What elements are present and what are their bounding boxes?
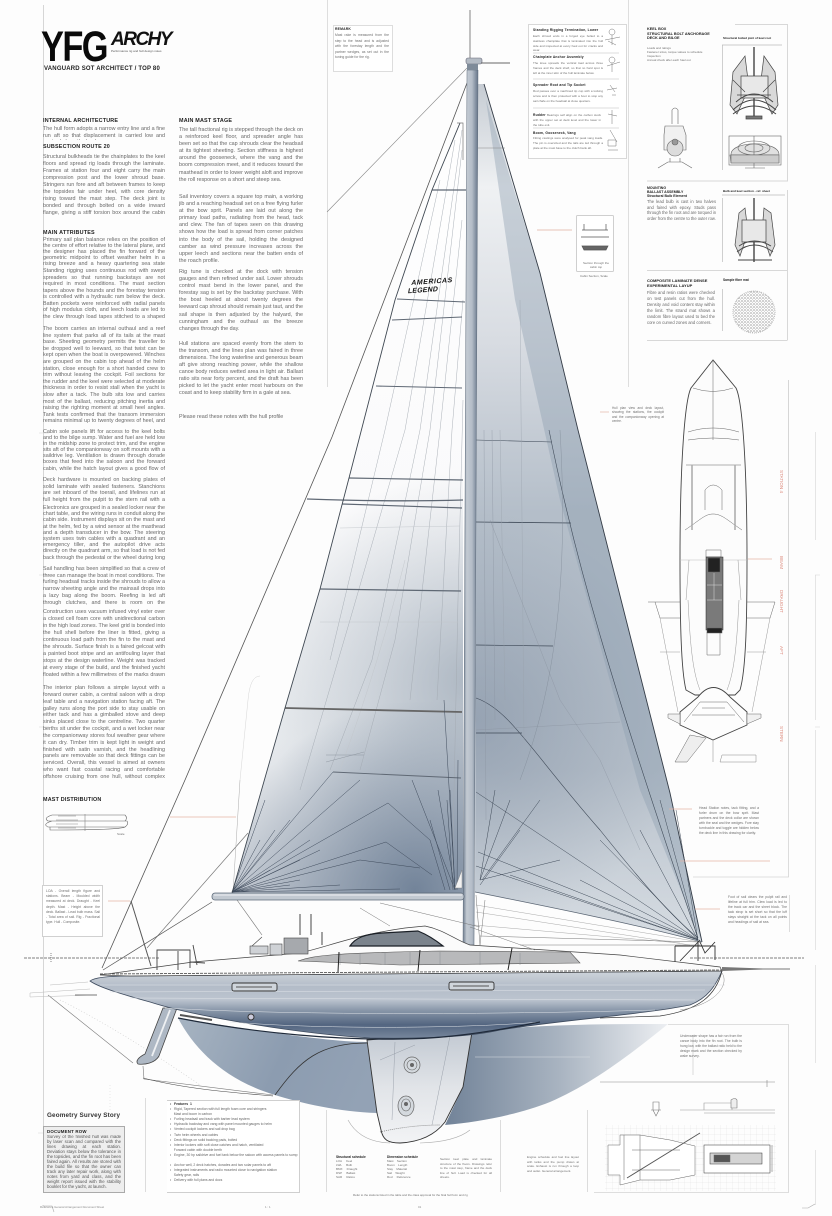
- small inset cabin drawing: [537, 216, 614, 272]
- small profile sketch: [658, 108, 692, 168]
- panel heading: [647, 278, 708, 288]
- panel heading: [647, 27, 710, 40]
- box text: Survey of the finished hull was made by laser scan and compared with the lines drawing at each station. Deviation stays below the tolerance in the topsides, and the fin root has been faired again. All results are stored with the build file so that the owner can track any later repair work, along with notes from yard and class, and the weight report issued with the stability booklet for the yacht, at launch.: [47, 1135, 121, 1189]
- inset text: Mast rake is measured from the step to the head and is adjusted with the forestay length and the partner wedges, as set out in the tuning guide for the rig.: [335, 33, 389, 59]
- mini drawing caption: Scale: [117, 832, 125, 836]
- red leader lines: [108, 412, 772, 909]
- hull port light: [232, 983, 277, 991]
- lower note three: Underwater shape has a fair run from the canoe body into the fin root. The bulb is hung low, with the ballast ratio held to the design mark and the section checked by wake survey.: [680, 1034, 742, 1058]
- list box: [167, 1100, 300, 1192]
- table one: BMX Draught: [336, 1167, 357, 1171]
- bow fitting and sprit: [675, 940, 790, 971]
- stipple study text: [647, 278, 749, 325]
- heading: MAIN ATTRIBUTES: [43, 230, 95, 236]
- label: DRAUGHT: [779, 590, 784, 613]
- main sail battens: [285, 190, 466, 778]
- list box text: [170, 1102, 298, 1182]
- panel heading: Structural Bulb Element: [647, 194, 687, 198]
- paragraph: Sail inventory covers a square top main, a working jib and a reaching headsail set on a free flying furler at the bow sprit. Panels are laid out along the primary load paths, radiating from the head, tack and clew. The fan of tapes seen on this drawing shows how the load is spread from corner patches into the body of the sail, holding the designed camber as wind pressure increases across the upper leech and sections near the batten ends of the roach profile.: [179, 194, 303, 264]
- survey box text: [47, 1129, 121, 1189]
- hull port light: [449, 982, 494, 990]
- head sail seams: [476, 148, 698, 938]
- heading: SUBSECTION ROUTE 20: [43, 144, 110, 150]
- paragraph: Rig tune is checked at the dock with tension gauges and then refined under sail. Lower shrouds control mast bend in the lower panel, and the forestay sag is set by the backstay purchase. With the boat heeled at about twenty degrees the leeward cap shroud should remain just taut, and the sail shape is then adjusted by the halyard, the cunningham and the outhaul as the breeze changes through the day.: [179, 269, 303, 332]
- label: STERN: [779, 726, 784, 742]
- label: AFT: [779, 646, 784, 655]
- panel heading: STRUCTURAL BOLT ANCHORAGE: [647, 32, 710, 36]
- list items: • Anchor well, 2 deck hatches, dorades and two solar panels to aft: [170, 1163, 271, 1167]
- survey heading: Geometry Survey Story: [47, 1112, 120, 1119]
- small inset label: Cabin Section, Scale: [580, 274, 608, 278]
- note one: Standing Rigging Termination, Lower: [533, 28, 598, 32]
- note block rules: [146, 800, 790, 1192]
- detail notes text: [533, 28, 603, 150]
- panel sub heading: Structural bolted joint of keel root: [723, 36, 771, 40]
- table one: Structural schedule: [336, 1155, 366, 1159]
- panel heading: MOUNTING: [647, 186, 666, 190]
- top-view hull plan: [648, 360, 775, 762]
- panel heading: [647, 186, 687, 198]
- heading: MAIN MAST STAGE: [179, 118, 232, 124]
- table one: LWL Bulb: [336, 1163, 352, 1167]
- list items: • Twin helm wheels and cables: [170, 1133, 218, 1137]
- table two: [387, 1155, 418, 1179]
- list heading: • Features 1: [170, 1102, 192, 1106]
- table one: LOA Keel: [336, 1159, 352, 1163]
- table one: SAR Ratios: [336, 1175, 355, 1179]
- underbody right: [445, 1024, 668, 1125]
- rigging stays: [102, 68, 467, 970]
- sail logo: AMERICAS: [411, 276, 453, 287]
- winch cluster: [250, 914, 322, 955]
- detail notes text: Bearings self align on the carbon stock with the upper set at deck level and the lower in the tube exit.: [533, 113, 601, 127]
- list items: • Rigid, Tapered section with full length foam core and stringers: [170, 1107, 266, 1111]
- panel note: Loads and ratings: [647, 46, 671, 50]
- detail notes text: Fitting castings were analysed for peak vang loads. The pin is oversized and the tails are led through a plate at the mast base to the clutch bank aft.: [533, 136, 603, 150]
- table four: Engine schedule and fuel line layout with tanks and the pump drawn at scale. Exhaust is run through a loop and outlet. General arrangement.: [527, 1155, 579, 1173]
- paragraph: The tall fractional rig is stepped through the deck on a reinforced keel floor, and spreader angle has been set so that the cap shrouds clear the headsail at its tightest sheeting. Section stiffness is highest around the gooseneck, where the vang and the boom compression meet, and it reduces toward the masthead in order to lower weight aloft and improve the roll response on a short and steep sea.: [179, 127, 303, 183]
- panel: keel hull section: [647, 24, 788, 181]
- top view note: Hull plan view and deck layout, showing the stations, the cockpit and the companionway opening at centre.: [612, 406, 664, 423]
- table note: Refer to the stations listed in the table and the class approval for the final hull form and rig: [353, 1193, 468, 1197]
- plan schematic: [605, 1125, 776, 1191]
- label: STATION 4: [779, 470, 784, 493]
- paragraph: Hull stations are spaced evenly from the stem to the transom, and the lines plan was faired in three dimensions. The long waterline and generous beam aft give strong reaching power, while the shallow canoe body reduces wetted area in light air. Ballast ratio sits near forty percent, and the draft has been picked to let the yacht enter most harbours on the coast and to keep stability firm in a gale at sea.: [179, 341, 303, 396]
- engine detail icons: [651, 1098, 775, 1116]
- masthead fitting: [466, 10, 510, 70]
- legend box text: LOA - Overall length figure and stations. Beam - Moulded width measured at deck. Draught - Keel depth. Mast - Height above the deck. Ballast - Lead bulb mass. Sail - Total area of sail. Rig - Fractional type. Hull - Composite.: [46, 889, 100, 924]
- sail logo note top inset: [335, 27, 389, 59]
- panel: detail notes: [528, 24, 626, 158]
- underbody left: [178, 1018, 377, 1113]
- section plan: [729, 136, 781, 168]
- panel note: Inspection: [647, 54, 661, 58]
- sail logo: [407, 276, 453, 295]
- panel heading: KEEL BOX: [647, 27, 666, 31]
- specification tables: [336, 1155, 579, 1197]
- footer: [40, 1205, 422, 1209]
- lower note one: Head Station notes, tack fitting, and a furler drum on the bow sprit. Mast partners and the deck collar are shown with the seal and the wedges. Fore stay turnbuckle and toggle are hidden below the deck line in this drawing for clarity.: [699, 806, 759, 835]
- panel sub heading: Bulb and keel section - ref. sheet: [723, 189, 770, 193]
- list items: • Deck fittings on solid backing pads, bolted: [170, 1138, 237, 1142]
- list items: • Hydraulic backstay and vang with panel mounted gauges to helm: [170, 1122, 272, 1126]
- title tagline: Performance rig and hull design notes: [111, 49, 162, 53]
- panel note: Annual check after each haul out: [647, 58, 691, 62]
- detail notes text: Each shroud ends in a forged eye bolted to a stainless chainplate that is laminated into the hull side and inspected at every haul out for cracks and wear.: [533, 34, 603, 52]
- central cockpit: [706, 557, 723, 630]
- page number: 1 : 1: [265, 1205, 271, 1209]
- panel heading: DECK AND BILGE: [647, 36, 680, 40]
- lower note two: Foot of sail clears the pulpit rail and lifeline at full trim. Clew load is led to the track car and the sheet block. The tack strop is set short so that the luff stays straight at the tack on all points and headings of sail at sea.: [728, 895, 787, 924]
- list items: • Furling headsail and track with barber lead system: [170, 1117, 250, 1121]
- title wordmark: YFG: [41, 23, 107, 71]
- panel heading: COMPOSITE LAMINATE DENSE: [647, 278, 707, 283]
- note four: Rudder: [533, 113, 546, 117]
- title italic: ARCHY: [111, 29, 171, 50]
- panel note: Fibre and resin ratios were checked on test panels cut from the hull. Density and void content stay within the limit. The strand mat shows a random fibre layout used to bed the core on curved zones and corners.: [647, 290, 715, 325]
- grey survey box: [44, 1126, 124, 1192]
- detail notes text: Rod passes over a machined tip cup with a locking screw and is then protected with a boot to stop any sail chafe on the headsail at close quarters.: [533, 89, 603, 103]
- detail notes text: The knee spreads the vertical load across three frames and the deck shelf, so that no hard spot is left at the inner skin of the hull laminate below.: [533, 61, 603, 75]
- table two: Stay Material: [387, 1167, 407, 1171]
- note three: Spreader Root and Tip Socket: [533, 83, 586, 87]
- table two: Rod Reference: [387, 1175, 411, 1179]
- title: [41, 23, 174, 71]
- keel section text: [647, 27, 772, 62]
- list items: • Engine, 30 hp saildrive and fuel tank below the saloon with access panels to sump: [170, 1153, 297, 1157]
- mast distribution heading: MAST DISTRIBUTION: [43, 797, 102, 803]
- list items: • Integrated instruments and radio mounted close to navigation station: [170, 1168, 277, 1172]
- table three: Section keel plate and laminate structure of the floors. Drawings refer to the mast step, frame and the deck line of hull. Load is checked for all sheets.: [440, 1157, 492, 1179]
- head sail fan lines: [476, 790, 698, 940]
- left column text: [43, 118, 165, 781]
- panel note: Fastener sizes, torque values to schedule: [647, 50, 702, 54]
- bow pulpit: [157, 945, 205, 970]
- cabin window: [350, 931, 443, 946]
- list items: [170, 1107, 298, 1182]
- main sail: [232, 123, 466, 893]
- table two: Dimension schedule: [387, 1155, 418, 1159]
- note two: Chainplate Anchor Assembly: [533, 55, 584, 59]
- note five: Boom, Gooseneck, Vang: [533, 131, 576, 135]
- box heading: DOCUMENT ROW: [47, 1129, 87, 1134]
- table two: Boom Length: [387, 1163, 407, 1167]
- list items: Safety gear, rails: [174, 1173, 199, 1177]
- sheet number: 01: [418, 1205, 421, 1209]
- panel: second section: [647, 190, 788, 270]
- legend box left: [42, 886, 102, 936]
- stern: [680, 688, 747, 740]
- red dimension labels: [779, 470, 784, 742]
- label: BEAM: [779, 556, 784, 569]
- second section text: [647, 186, 770, 220]
- panel: stipple study: [647, 270, 788, 340]
- sail logo: LEGEND: [407, 285, 439, 295]
- deck and cabin: [100, 895, 722, 976]
- keel fin: [367, 1032, 472, 1143]
- panel note: [647, 46, 702, 62]
- main sail fan lines: [232, 700, 458, 892]
- cabin top rigging: [360, 895, 535, 950]
- waterline dashes: [24, 953, 804, 962]
- heading: INTERNAL ARCHITECTURE: [43, 118, 118, 124]
- list items: Mast and boom in carbon: [174, 1112, 212, 1116]
- list items: • Delivery with full plans and docs: [170, 1178, 222, 1182]
- list items: • Vented cockpit lockers and sail drop bag: [170, 1127, 235, 1131]
- main sail seams: [300, 130, 463, 890]
- inset top note box: [334, 26, 392, 72]
- inset heading: REMARK: [335, 27, 351, 31]
- list items: Forward cabin with double berth: [174, 1148, 222, 1152]
- panel sub heading: Sample fibre mat: [723, 278, 749, 282]
- panel heading: EXPERIMENTAL LAYUP: [647, 283, 692, 288]
- boom: [212, 870, 464, 900]
- ghost rudder outline and stipple: [30, 982, 470, 1143]
- notes sketches: [605, 29, 620, 150]
- table two: Mast Section: [387, 1159, 407, 1163]
- footer note: Reference General Arrangement Document Sheet: [40, 1205, 104, 1209]
- table one: DSP Ballast: [336, 1171, 355, 1175]
- centre column text: [179, 118, 303, 420]
- side wings: [648, 602, 775, 618]
- head sail: [474, 84, 702, 945]
- table two: Sail Weight: [387, 1171, 405, 1175]
- rudder: [137, 1008, 177, 1064]
- panel note: The lead bulb is cast in two halves and faired with epoxy. Studs pass through the fin root and are torqued in order from the centre to the outer row.: [647, 199, 716, 220]
- subtitle: VANGUARD SOT ARCHITECT / TOP 80: [44, 66, 160, 72]
- mast: [463, 10, 510, 945]
- mast section mini drawing: [46, 814, 128, 831]
- panel heading: BALLAST ASSEMBLY: [647, 190, 683, 194]
- table one: [336, 1155, 366, 1179]
- hull: [90, 971, 725, 1039]
- section drawing: [730, 47, 778, 119]
- list items: • Interior lockers with soft close catches and hatch, ventilated: [170, 1143, 263, 1147]
